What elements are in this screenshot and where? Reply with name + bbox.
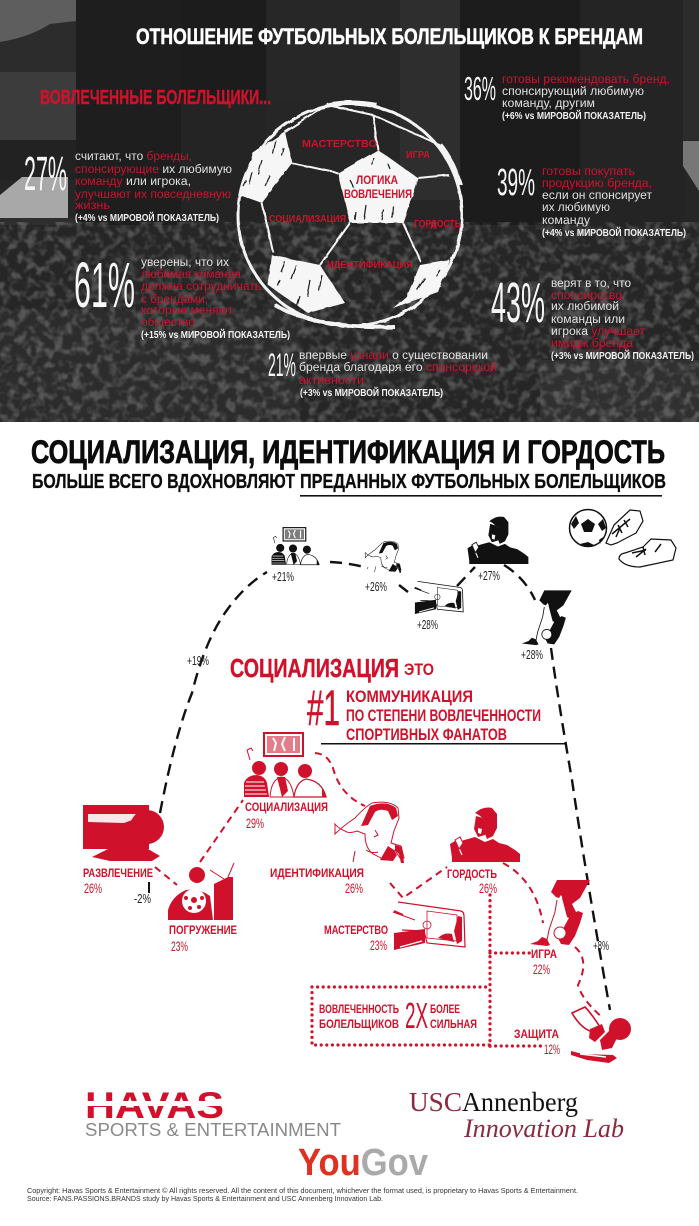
stage: identification: 26% bbox=[345, 880, 363, 896]
subheading: БОЛЬШЕ ВСЕГО ВДОХНОВЛЯЮТ bbox=[32, 471, 295, 493]
stat: 39%: продукцию бренда, bbox=[542, 178, 652, 190]
chart line: average fans (red dashed) bbox=[155, 753, 603, 1018]
stat: 61%: 61% bbox=[74, 249, 135, 321]
stage: mastery bbox=[324, 902, 465, 953]
stage: socialization: СОЦИАЛИЗАЦИЯ bbox=[245, 800, 328, 814]
stat: 43%: 43% bbox=[491, 271, 545, 335]
stat: 61%: с брендами, bbox=[141, 294, 208, 306]
stat: 61%: (+15% vs МИРОВОЙ ПОКАЗАТЕЛЬ) bbox=[141, 328, 290, 341]
subheading bbox=[32, 471, 666, 497]
stat: 27%: жизнь bbox=[75, 200, 110, 212]
copyright and source bbox=[27, 1187, 578, 1203]
label: identification: ИДЕНТИФИКАЦИЯ bbox=[327, 259, 413, 271]
label: logic of engagement: ЛОГИКА bbox=[356, 173, 398, 187]
stat: 21% bbox=[268, 347, 497, 399]
label: pride: ГОРДОСТЬ bbox=[414, 218, 461, 230]
copyright and source: Copyright: Havas Sports & Entertainment © All rights reserved. All the content of this document, whichever the format used, is proprietary to Havas Sports & Entertainment. bbox=[27, 1187, 578, 1195]
stat: 61%: любимая команда bbox=[141, 269, 242, 281]
callout: twice as strong engagement: 2X bbox=[405, 995, 428, 1036]
delta labels: +21% bbox=[272, 569, 294, 584]
stage: socialization: 29% bbox=[246, 815, 264, 831]
stage: advocacy bbox=[514, 1007, 631, 1063]
callout: socialization is #1 bbox=[230, 653, 566, 744]
callout: twice as strong engagement: БОЛЕЕ bbox=[430, 1002, 460, 1016]
copyright and source: Source: FANS.PASSIONS.BRANDS study by Havas Sports & Entertainment and USC Annenberg Innovation Lab. bbox=[27, 1196, 383, 1203]
stat: 61%: общество bbox=[141, 317, 195, 329]
icon: playing legs, black bbox=[522, 590, 572, 645]
stat: 27%: считают, что бренды, bbox=[75, 151, 192, 163]
stat: 21%: 21% bbox=[268, 347, 296, 383]
callout: socialization is #1: ЭТО bbox=[404, 660, 434, 679]
stat: 39%: готовы покупать bbox=[542, 166, 635, 178]
icon: immersion bbox=[168, 863, 234, 920]
stat: 27%: улучшают их повседневную bbox=[75, 189, 231, 201]
stat: 39% bbox=[497, 162, 686, 239]
icon: identification bbox=[335, 802, 404, 863]
stage: game: 22% bbox=[533, 961, 550, 977]
label: engagement: ВОВЛЕЧЕНИЯ bbox=[344, 187, 412, 201]
stat: 21%: (+3% vs МИРОВОЙ ПОКАЗАТЕЛЬ) bbox=[300, 386, 443, 399]
delta labels: +28% bbox=[417, 617, 438, 632]
stage: entertainment bbox=[83, 805, 164, 896]
stat: 27%: 27% bbox=[24, 148, 67, 201]
stage: entertainment: РАЗВЛЕЧЕНИЕ bbox=[83, 866, 153, 880]
logo: Havas Sports & Entertainment bbox=[85, 1085, 341, 1140]
delta labels: +19% bbox=[187, 653, 209, 668]
callout: twice as strong engagement bbox=[312, 895, 542, 1047]
stage: immersion: 23% bbox=[171, 938, 188, 954]
logo: Havas Sports & Entertainment: SPORTS & ENTERTAINMENT bbox=[85, 1120, 341, 1140]
stat: 39%: если он спонсирует bbox=[542, 190, 653, 202]
stat: 61% bbox=[74, 249, 290, 341]
logo: YouGov: YouGov bbox=[298, 1142, 428, 1184]
icon: advocacy bbox=[571, 1007, 631, 1063]
delta labels: -2% bbox=[134, 891, 151, 906]
icon: socialization bbox=[244, 733, 327, 797]
stage: pride bbox=[447, 808, 520, 896]
stat: 39%: команду bbox=[542, 215, 590, 227]
stat: 61%: уверены, что их bbox=[141, 257, 229, 269]
callout: socialization is #1: СПОРТИВНЫХ ФАНАТОВ bbox=[346, 725, 507, 744]
stat: 43%: команды или bbox=[551, 314, 625, 326]
stage: mastery: МАСТЕРСТВО bbox=[324, 923, 388, 937]
icon: fans watching tv, black bbox=[272, 528, 320, 565]
stat: 36%: команду, другим bbox=[502, 98, 595, 110]
stat: 43%: имидж бренда bbox=[551, 338, 634, 350]
stage: immersion: ПОГРУЖЕНИЕ bbox=[169, 923, 237, 937]
icon: entertainment bbox=[83, 805, 164, 861]
icon: mastery bbox=[393, 902, 465, 950]
stage: immersion bbox=[168, 863, 237, 954]
logo: USC Annenberg Innovation Lab: Innovation Lab bbox=[463, 1114, 624, 1143]
stage: entertainment: 26% bbox=[84, 880, 102, 896]
stage: game bbox=[530, 880, 590, 977]
stat: 39%: их любимую bbox=[542, 202, 610, 214]
panel: dark photo header bbox=[0, 0, 699, 422]
callout: twice as strong engagement: БОЛЕЛЬЩИКОВ bbox=[319, 1017, 399, 1031]
stat: 43% bbox=[491, 271, 694, 362]
logo: USC Annenberg Innovation Lab: USC bbox=[409, 1087, 462, 1117]
icon: pride bbox=[450, 808, 520, 862]
label: mastery: МАСТЕРСТВО bbox=[302, 138, 377, 150]
stat: 36%: 36% bbox=[464, 70, 496, 107]
stage: pride: ГОРДОСТЬ bbox=[447, 867, 497, 881]
delta labels: +8% bbox=[593, 938, 609, 953]
stat: 36% bbox=[464, 70, 670, 122]
stage: identification bbox=[270, 802, 404, 896]
delta labels: +28% bbox=[521, 647, 543, 662]
callout: socialization is #1: ПО СТЕПЕНИ ВОВЛЕЧЕННОСТИ bbox=[346, 706, 541, 725]
logo: USC Annenberg Innovation Lab: Annenberg bbox=[462, 1087, 578, 1117]
stage: advocacy: 12% bbox=[544, 1041, 560, 1057]
label: socialization: СОЦИАЛИЗАЦИЯ bbox=[269, 213, 346, 225]
stage: socialization bbox=[244, 733, 328, 831]
stage: advocacy: ЗАЩИТА bbox=[514, 1027, 559, 1041]
stat: 21%: активности bbox=[299, 375, 364, 387]
stage: pride: 26% bbox=[479, 880, 497, 896]
icon: game bbox=[530, 880, 590, 946]
stat: 36%: (+6% vs МИРОВОЙ ПОКАЗАТЕЛЬ) bbox=[502, 109, 646, 122]
logo: Havas Sports & Entertainment: HAVAS bbox=[85, 1085, 224, 1126]
stat: 27%: команду или игрока, bbox=[75, 176, 191, 188]
label: game: ИГРА bbox=[406, 149, 430, 161]
stat: 43%: верят в то, что bbox=[551, 278, 631, 290]
callout: socialization is #1: #1 bbox=[307, 680, 340, 736]
stage: game: ИГРА bbox=[531, 947, 557, 961]
stage: mastery: 23% bbox=[370, 937, 387, 953]
stat: 21%: впервые узнали о существовании bbox=[299, 350, 488, 362]
icon: shouting man, black bbox=[468, 517, 528, 564]
stat: 43%: спонсирство bbox=[551, 290, 622, 302]
delta labels: +27% bbox=[478, 568, 500, 583]
callout: twice as strong engagement: СИЛЬНАЯ bbox=[430, 1017, 477, 1031]
stat: 27% bbox=[24, 148, 232, 224]
stat: 27%: спонсирующие их любимую bbox=[75, 164, 232, 176]
illustration: football with engagement logic bbox=[238, 102, 462, 327]
stat: 36%: готовы рекомендовать бренд, bbox=[502, 74, 670, 86]
icon: woman, black bbox=[365, 541, 401, 573]
icon: tablet, black bbox=[414, 581, 463, 614]
heading: engaged fans: ВОВЛЕЧЕННЫЕ БОЛЕЛЬЩИКИ... bbox=[40, 87, 271, 109]
logo: USC Annenberg Innovation Lab bbox=[409, 1087, 624, 1143]
stat: 61%: которые меняют bbox=[141, 305, 234, 317]
stat: 43%: их любимой bbox=[551, 301, 619, 313]
callout: socialization is #1: КОММУНИКАЦИЯ bbox=[346, 687, 473, 706]
stat: 27%: (+4% vs МИРОВОЙ ПОКАЗАТЕЛЬ) bbox=[75, 211, 219, 224]
stat: 39%: 39% bbox=[497, 162, 535, 204]
stat: 61%: должна сотрудничать bbox=[141, 281, 261, 293]
chart line: committed fans (black dashed) bbox=[149, 562, 610, 1010]
delta labels bbox=[134, 568, 609, 953]
stat: 36%: спонсирующий любимую bbox=[502, 86, 644, 98]
callout: socialization is #1: СОЦИАЛИЗАЦИЯ bbox=[230, 653, 399, 683]
delta labels: +26% bbox=[365, 579, 387, 594]
stat: 43%: игрока улучшает bbox=[551, 326, 646, 338]
icon: ball and boots bbox=[570, 510, 676, 567]
callout: twice as strong engagement: ВОВЛЕЧЕННОСТЬ bbox=[319, 1002, 399, 1016]
stage: identification: ИДЕНТИФИКАЦИЯ bbox=[270, 866, 364, 880]
stat: 21%: бренда благодаря его спонсорской bbox=[299, 362, 497, 374]
